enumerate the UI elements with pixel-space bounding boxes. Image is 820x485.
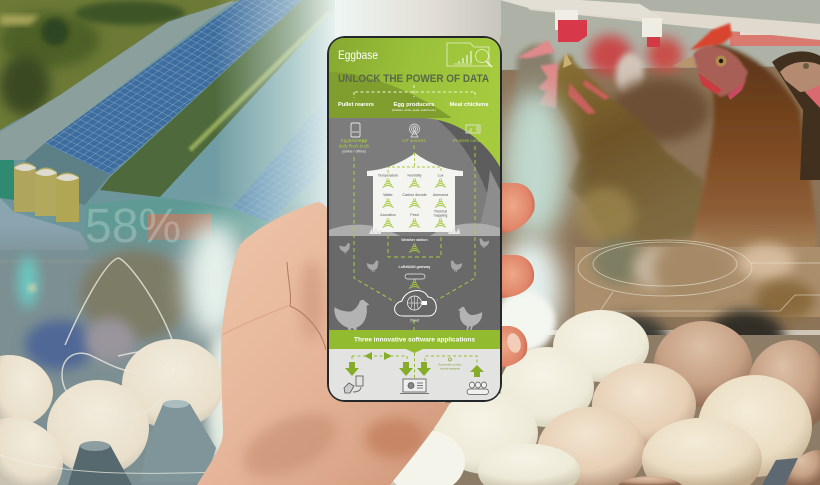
green band [329, 330, 500, 353]
dashed network lines [354, 145, 475, 331]
haze over hens [575, 240, 820, 320]
watermark: percentage: 58% [85, 200, 181, 253]
field and trees [0, 0, 240, 130]
icon: IoT sensors [410, 124, 420, 137]
icon: eggs on conveyor [467, 382, 488, 394]
section labels: (online / offline) [342, 150, 366, 154]
sensor labels: Lux [438, 174, 444, 178]
section labels: Process controllers [453, 138, 492, 143]
hen far right [772, 51, 820, 180]
sensor labels: Thermal [434, 210, 447, 214]
icon: smartphone app [351, 123, 360, 137]
icon: drop outline [62, 258, 177, 417]
weather station [401, 238, 428, 252]
green band: Three innovative software applications [354, 336, 476, 344]
user group labels: (chicken, duck, quail, ostrich etc.) [392, 108, 436, 112]
sensor labels: Temperature [378, 174, 398, 178]
water nipples [555, 10, 662, 47]
cloud: Cloud [410, 318, 419, 322]
sensor labels: Humidity [408, 174, 422, 178]
grey barn roof [0, 0, 235, 160]
phone screen [329, 38, 500, 400]
user group labels [338, 102, 488, 112]
sensor labels [378, 174, 448, 218]
software panel [329, 349, 500, 400]
sensor labels: Water [383, 193, 394, 197]
silos [0, 162, 90, 250]
eggs left [122, 339, 224, 429]
phone body [327, 36, 502, 402]
weather station: Weather station [401, 238, 428, 242]
user group labels: Egg producers [394, 102, 434, 108]
sensor labels: Acoustics [380, 213, 396, 217]
left bottom: blue data overlay and eggs [0, 220, 245, 485]
fingers [498, 183, 535, 233]
gateway: LoRaWAN gateway [399, 265, 430, 269]
section labels: EggbaseApp [341, 138, 368, 143]
logo: Eggbase [338, 48, 378, 62]
section labels: IoT sensors [402, 138, 426, 143]
hand shading [222, 260, 425, 485]
section labels: daily flock book [339, 144, 370, 148]
dashed connector top [354, 85, 475, 98]
icon: documents and phone [344, 376, 363, 393]
left background: farm aerial with solar panels [0, 0, 335, 260]
sensor icons [382, 179, 446, 228]
grey panel shapes [329, 118, 487, 236]
palm and thumb [197, 202, 450, 485]
sensor labels: Carbon dioxide [402, 193, 427, 197]
icon: laptop [400, 379, 429, 394]
sensor labels: Feed [410, 213, 419, 217]
sensor labels: mapping [434, 214, 447, 218]
green header [329, 38, 500, 167]
phone [327, 36, 502, 402]
right bottom: eggs [385, 292, 820, 485]
HUD ellipses [578, 240, 820, 311]
section labels [338, 138, 480, 154]
carton cones [140, 401, 216, 482]
title: UNLOCK THE POWER OF DATA [338, 73, 489, 85]
haze above phone [335, 0, 501, 37]
icon: data chart folder [447, 43, 492, 67]
grass tufts [369, 227, 460, 234]
icon: process controller [466, 125, 480, 133]
hen right [673, 23, 818, 256]
workflow arrows and lines: Automatic poultry [438, 362, 462, 366]
hen left [515, 40, 707, 245]
user group labels: Meat chickens [450, 102, 488, 108]
second roof [160, 10, 335, 212]
chickens [334, 238, 489, 333]
building inner dashes [388, 153, 441, 173]
green strip [100, 0, 335, 197]
workflow arrows and lines [345, 352, 484, 378]
right background: barn interior [498, 0, 820, 345]
sensor labels: Ammonia [433, 193, 448, 197]
cloud [395, 290, 436, 322]
workflow arrows and lines: sound analysis [440, 366, 460, 370]
building [367, 153, 463, 232]
user group labels: Pullet rearers [338, 102, 374, 108]
gateway [399, 265, 430, 288]
fingernail [505, 332, 523, 354]
haze beside phone [215, 0, 340, 250]
teal feather haze [501, 90, 569, 240]
hand holding phone [197, 183, 535, 485]
solar array [45, 0, 302, 175]
